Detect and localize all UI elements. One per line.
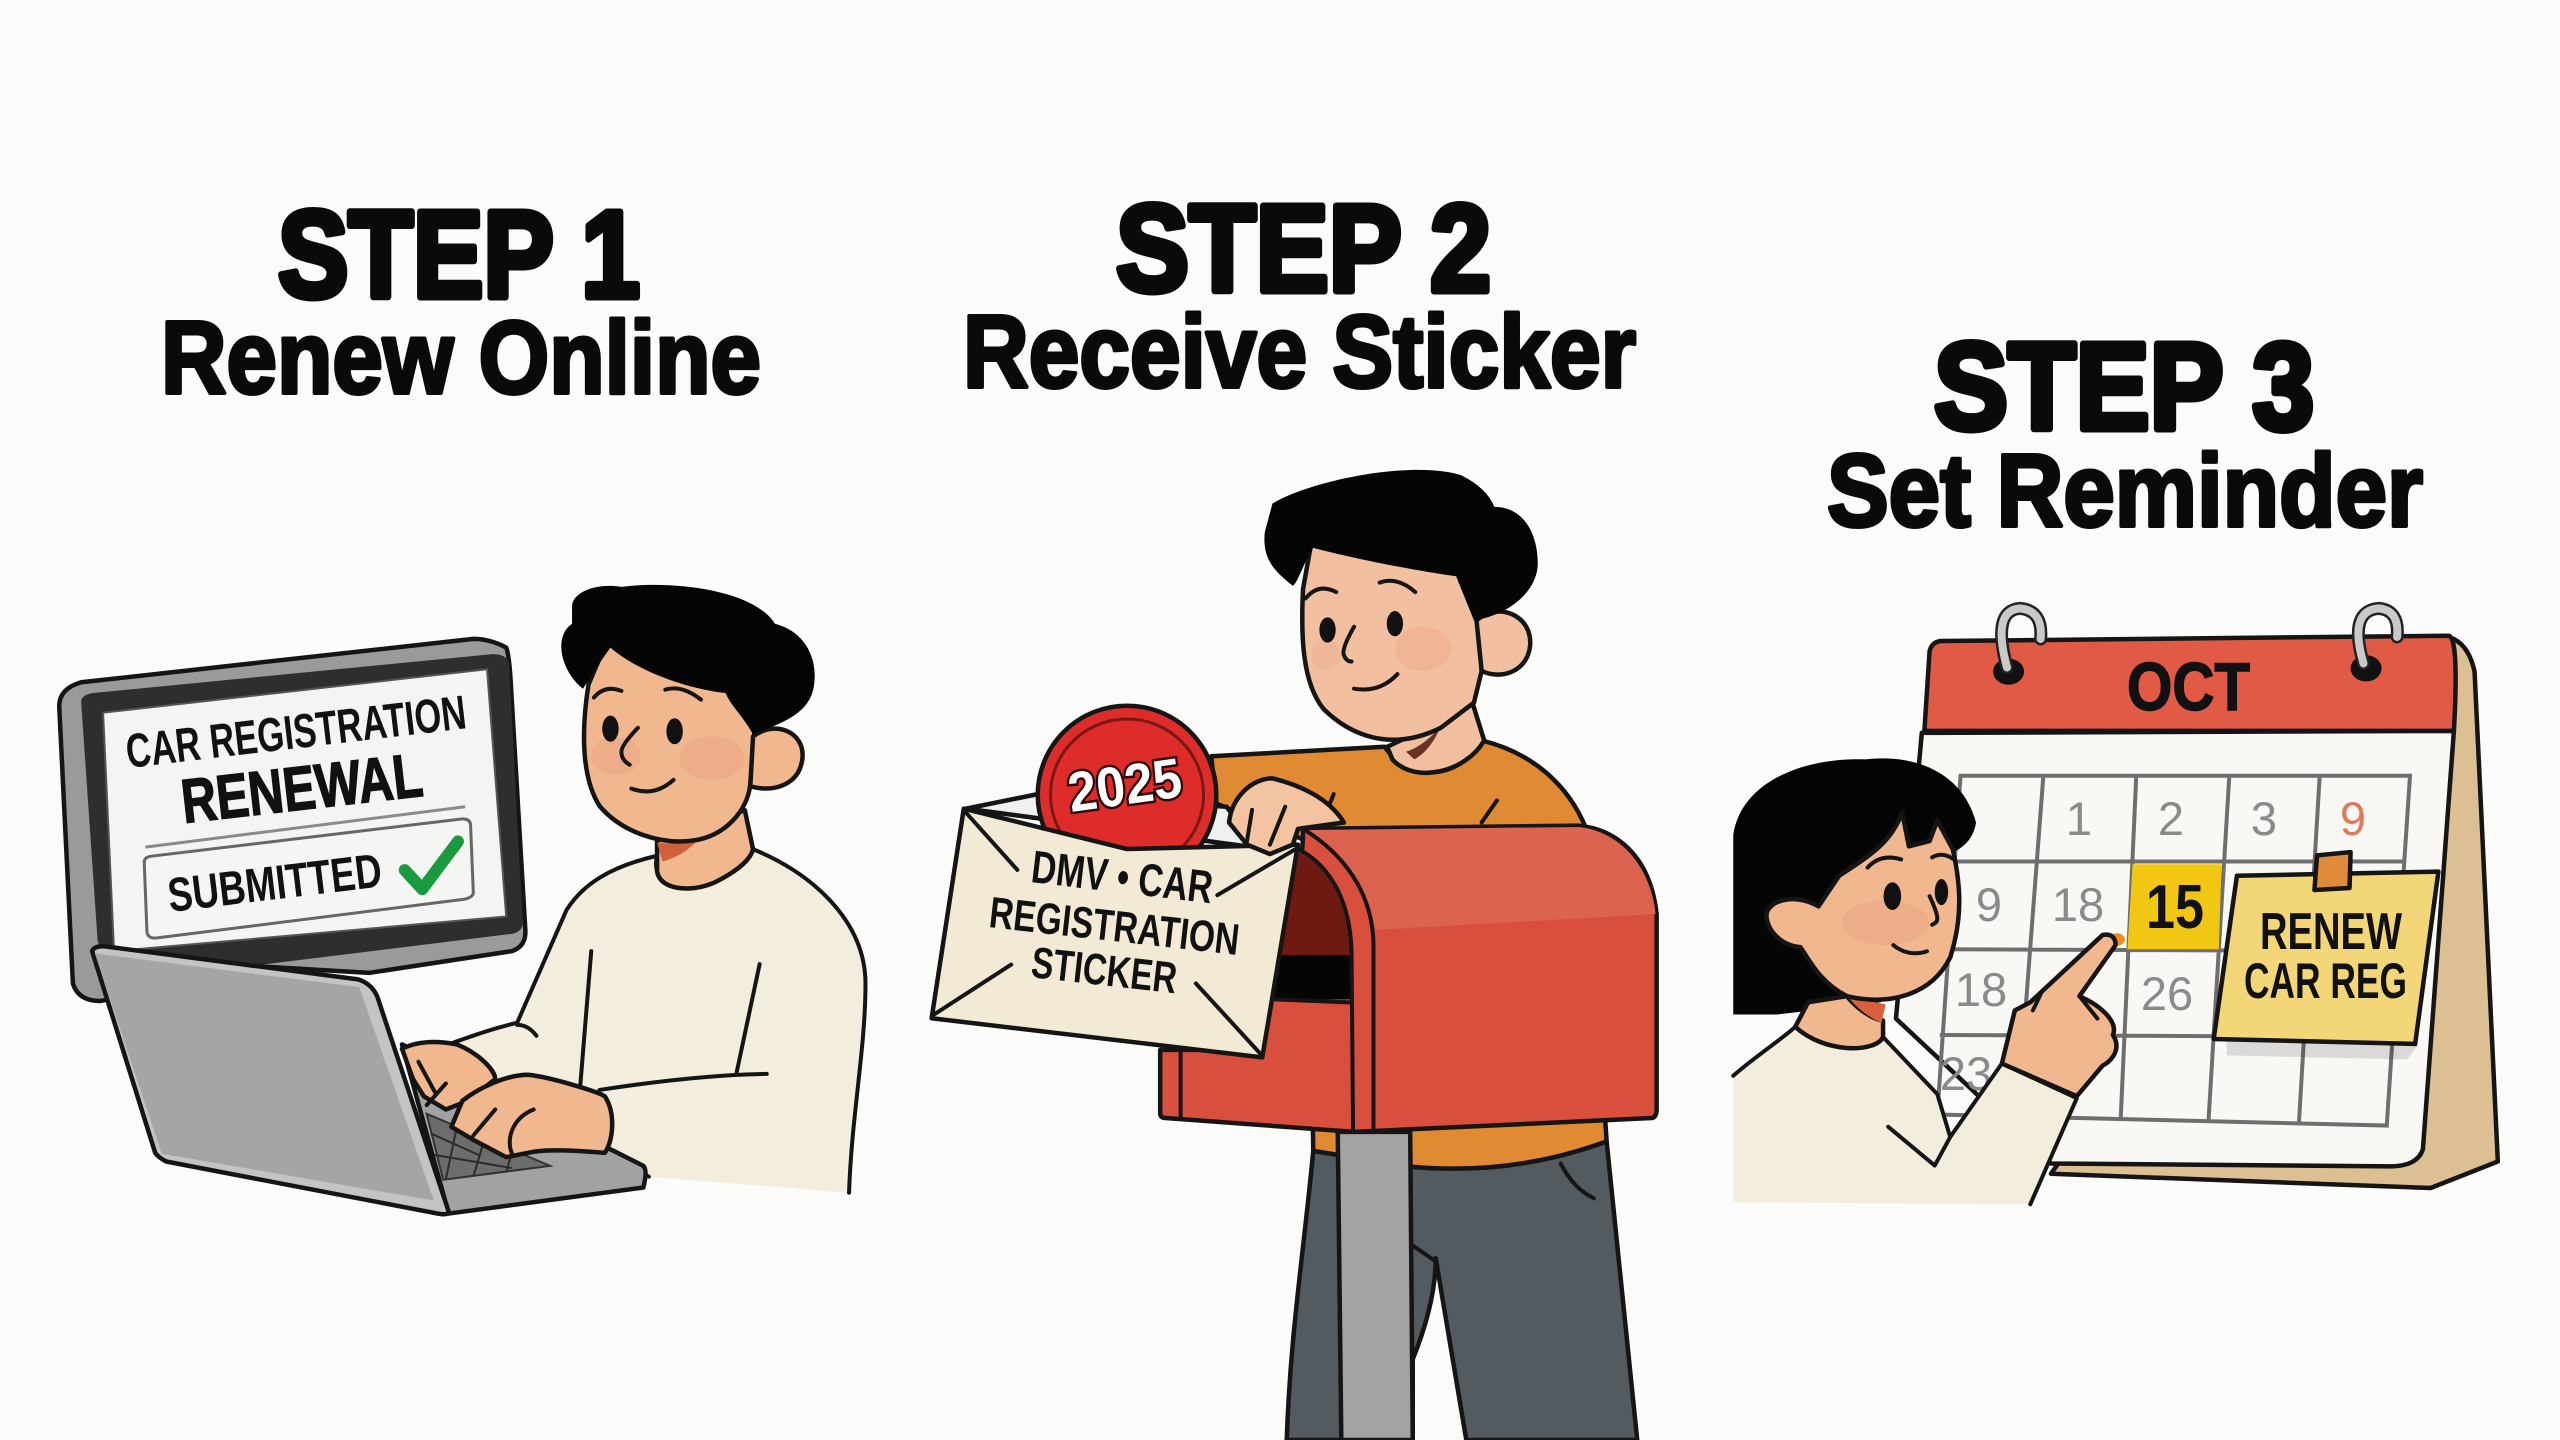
sticky note line 1: RENEW	[2260, 903, 2403, 961]
dates: 26	[2141, 967, 2193, 1020]
hand on envelope	[1229, 778, 1344, 854]
dates: 1	[2066, 792, 2092, 845]
hands typing	[402, 1042, 612, 1157]
envelope	[932, 809, 1298, 1057]
panel: step 2 receive sticker	[932, 181, 1657, 1440]
panel: step 1 renew online	[59, 187, 865, 1214]
icon: green check mark	[405, 841, 458, 889]
heading: step 3: STEP 3	[1934, 319, 2314, 456]
person: orange shirt	[1211, 740, 1607, 1169]
panel: step 3 set reminder	[1733, 319, 2498, 1204]
dates: 15	[2146, 873, 2204, 942]
laptop	[92, 946, 646, 1214]
hair	[1733, 758, 1976, 1015]
envelope line 1: DMV • CAR	[1029, 840, 1216, 913]
screen title: CAR REGISTRATION	[123, 686, 469, 779]
heading: step 1: STEP 1	[278, 187, 640, 324]
screen text	[123, 686, 469, 923]
dates	[1940, 792, 2366, 1100]
person: sweater	[454, 849, 865, 1193]
mailbox post	[1338, 1132, 1413, 1440]
sweater	[1733, 1027, 2077, 1204]
screen heading: RENEWAL	[178, 741, 426, 837]
subheading: renew online: Renew Online	[161, 300, 761, 415]
sticker year: 2025	[1064, 746, 1186, 824]
calendar text	[1940, 649, 2407, 1100]
dates: 2	[2158, 792, 2184, 845]
calendar stand	[2051, 639, 2498, 1188]
sticker 2025	[966, 706, 1257, 884]
dates: 18	[2052, 878, 2104, 931]
heading: step 2: STEP 2	[1116, 181, 1491, 318]
dates: 9	[1976, 878, 2002, 931]
neck shadow	[1848, 997, 1886, 1023]
calendar	[1896, 608, 2498, 1188]
submitted label: SUBMITTED	[165, 844, 385, 923]
subheading: set reminder: Set Reminder	[1827, 433, 2423, 548]
person: head	[1264, 470, 1538, 773]
illustration: monitor and shapes	[59, 585, 865, 1214]
envelope line 3: STICKER	[1029, 938, 1179, 1003]
dates: 18	[1955, 963, 2007, 1016]
calendar rings	[1993, 608, 2397, 685]
dates: 3	[2251, 792, 2277, 845]
envelope label	[987, 840, 1242, 1003]
face	[1767, 812, 1959, 1000]
month: OCT	[2127, 649, 2250, 725]
mailbox	[1160, 826, 1657, 1132]
pointing hand	[2002, 933, 2125, 1096]
date grid	[1937, 776, 2410, 1126]
subheading: receive sticker: Receive Sticker	[963, 294, 1636, 409]
envelope line 2: REGISTRATION	[987, 888, 1242, 965]
sticky note	[2214, 852, 2438, 1059]
sticky note line 2: CAR REG	[2244, 953, 2407, 1009]
calendar header	[1924, 636, 2456, 731]
monitor frame	[59, 639, 525, 1001]
person: pointing at calendar	[1733, 758, 2125, 1204]
highlighted date	[2127, 864, 2221, 949]
dates: 9	[2340, 792, 2366, 845]
person: pants	[1287, 1141, 1637, 1440]
calendar page	[1896, 731, 2454, 1166]
person: head	[561, 585, 815, 888]
illustration: person and mailbox	[932, 470, 1657, 1440]
neck	[1795, 996, 1883, 1048]
dates: 23	[1940, 1047, 1992, 1100]
